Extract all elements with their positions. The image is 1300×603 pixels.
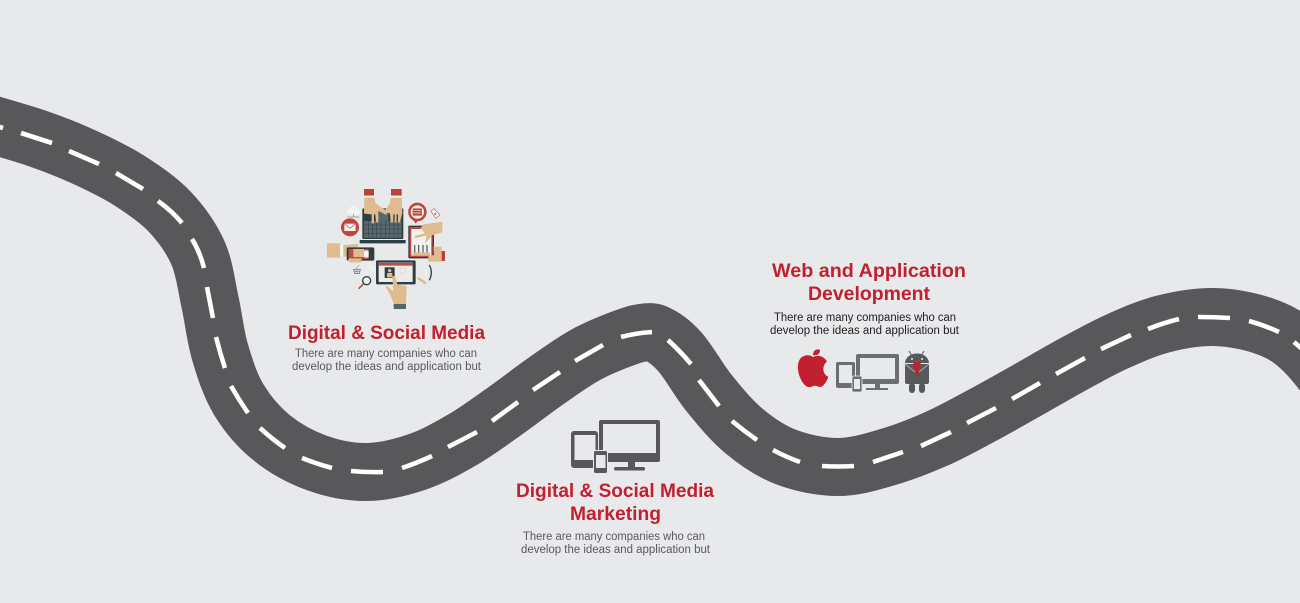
- bottom tablet: [376, 260, 416, 284]
- icon: web devices: [836, 354, 899, 392]
- heading: Digital & Social Media: Digital & Social Media: [288, 322, 485, 344]
- pen and signal right: [417, 265, 431, 285]
- road surface: [0, 118, 1300, 472]
- text: Web and Application description: [770, 312, 960, 337]
- typing hands: [364, 189, 402, 223]
- pointing hand: [386, 276, 407, 309]
- shopping basket: [354, 265, 360, 274]
- cloud: [347, 206, 360, 217]
- text: Marketing description: develop the ideas and application but: [521, 544, 711, 556]
- center dashes: [0, 126, 1300, 472]
- mail bubble: [341, 218, 359, 236]
- heading: Digital & Social Media Marketing: Digital & Social Media: [516, 480, 714, 502]
- heading: Web and Application Development: [772, 260, 966, 305]
- laptop: [360, 208, 406, 243]
- icon: android: [905, 351, 929, 393]
- text: Digital & Social Media description: There are many companies who can: [295, 348, 477, 360]
- text: Web and Application description: There are many companies who can: [774, 312, 956, 324]
- text: Web and Application description: develop the ideas and application but: [770, 325, 960, 337]
- tablet with chart: [408, 226, 434, 258]
- icon: marketing devices: [571, 420, 660, 474]
- icon: apple: [798, 349, 828, 387]
- price tag: [431, 209, 440, 218]
- hand on tablet: [414, 222, 445, 262]
- wireless signal left: [367, 262, 375, 271]
- text: Digital & Social Media description: develop the ideas and application but: [292, 361, 482, 373]
- heading: Web and Application Development: Web and Application: [772, 260, 966, 282]
- text: Digital & Social Media description: [292, 348, 482, 373]
- heading: Digital & Social Media Marketing: [516, 480, 714, 525]
- magnifier: [359, 277, 371, 289]
- heading: Digital & Social Media Marketing: Marketing: [570, 503, 661, 525]
- illustration: hands and digital devices: [327, 189, 445, 309]
- text: Marketing description: There are many companies who can: [523, 531, 705, 543]
- text: Marketing description: [521, 531, 711, 556]
- road with lane markings: [0, 118, 1300, 472]
- hand holding phone: [327, 243, 374, 262]
- heading: Web and Application Development: Development: [808, 283, 930, 305]
- chat bubble: [408, 203, 427, 224]
